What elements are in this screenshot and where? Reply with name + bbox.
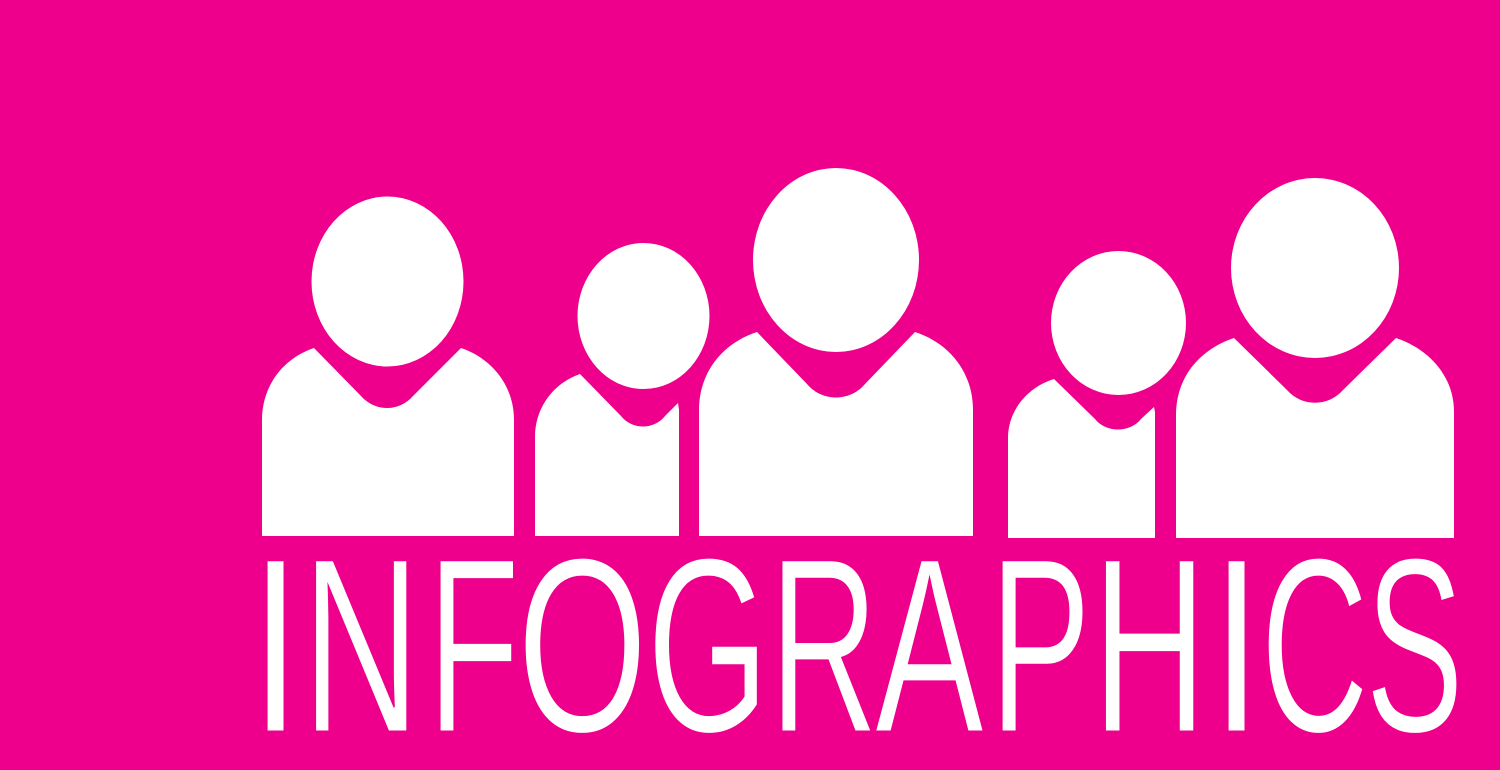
icon: person 1 — [262, 196, 514, 536]
icon: person 3 — [699, 168, 973, 536]
icon: person 4 — [1008, 251, 1186, 538]
title: INFOGRAPHICS — [250, 506, 1464, 770]
icon: person 5 — [1176, 178, 1454, 538]
icon: person 2 — [535, 243, 710, 536]
icon: row of five people — [262, 168, 1454, 538]
